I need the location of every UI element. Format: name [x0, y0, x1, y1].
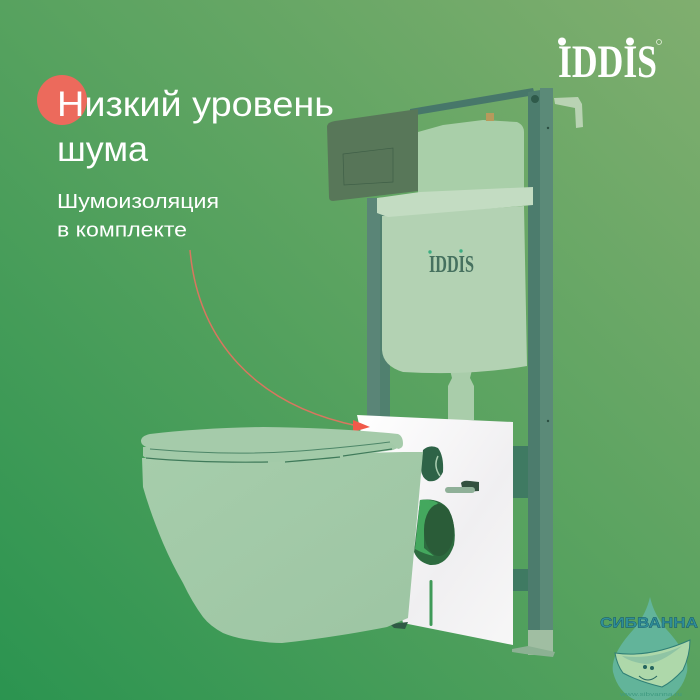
white noise-insulation board — [357, 415, 513, 645]
cistern — [377, 113, 533, 420]
bathtub basin — [622, 646, 682, 664]
water drop — [613, 597, 687, 700]
logo: IDDIS white: IDDIS — [558, 36, 657, 88]
cistern strap — [377, 187, 533, 217]
title — [57, 85, 334, 169]
subtitle: в комплекте — [57, 218, 187, 242]
flush button — [343, 148, 393, 185]
arrow — [190, 250, 370, 432]
website text: www.sibvanna.ru — [620, 692, 682, 698]
bracket under bowl — [390, 622, 408, 629]
large hole — [414, 499, 455, 565]
frame left post — [367, 198, 390, 420]
toilet bowl — [142, 452, 423, 643]
brand text: СИБВАННА — [600, 614, 698, 632]
logo on cistern — [428, 249, 474, 278]
cistern upper — [418, 120, 524, 195]
frame foot — [528, 630, 553, 655]
cistern lower — [382, 206, 527, 373]
seat ring shadow lines — [146, 449, 392, 462]
drain slot — [430, 580, 432, 626]
subtitle — [57, 190, 219, 242]
seat ring — [143, 440, 400, 462]
seat lid — [141, 427, 403, 452]
frame crossbars — [513, 446, 528, 498]
drain pipe — [448, 366, 474, 420]
frame top bar — [410, 88, 535, 116]
title: шума — [57, 130, 149, 169]
watermark: Sibvanna logo — [600, 597, 698, 700]
subtitle: Шумоизоляция — [57, 190, 219, 213]
pipe stub — [461, 481, 479, 492]
top hole — [421, 446, 443, 481]
installation frame — [367, 88, 583, 657]
flush panel — [327, 109, 418, 201]
bathtub face — [639, 665, 657, 680]
bracket — [554, 97, 583, 128]
wall-hung toilet — [141, 427, 423, 643]
logo on cistern: IDDIS — [429, 252, 474, 278]
title: Низкий уровень — [57, 85, 334, 124]
bathtub — [615, 640, 690, 687]
frame right post — [528, 88, 553, 630]
red accent circle — [37, 75, 87, 125]
